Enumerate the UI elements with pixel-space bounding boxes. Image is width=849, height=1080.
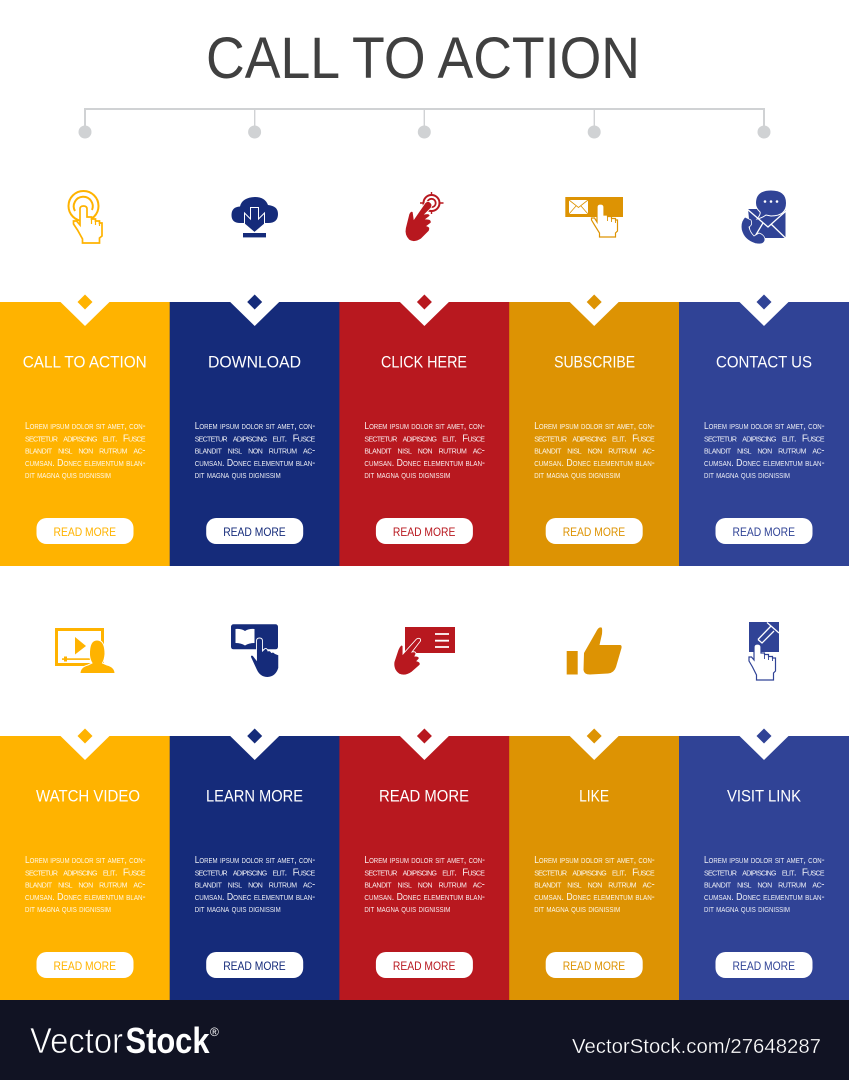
text block: dit magna quis dignissim (534, 470, 620, 481)
icon: learn more book (231, 624, 279, 678)
panel: contact us (679, 294, 849, 566)
text block: cumsan. Donec elementum blan- (195, 458, 315, 469)
heading: WATCH VIDEO (36, 787, 140, 806)
button (546, 952, 643, 978)
text block (195, 421, 316, 481)
text block: blandit nisl non rutrum ac- (25, 880, 146, 891)
text block: sectetur adipiscing elit. Fusce (534, 867, 655, 878)
heading: CLICK HERE (381, 353, 467, 372)
button (376, 518, 473, 544)
text block: dit magna quis dignissim (364, 904, 451, 915)
button: READ MORE (732, 959, 795, 973)
button (376, 952, 473, 978)
button: READ MORE (393, 525, 455, 539)
text block: blandit nisl non rutrum ac- (364, 880, 485, 891)
heading: READ MORE (379, 787, 469, 806)
logo: Stock (126, 1020, 210, 1061)
text block: Lorem ipsum dolor sit amet, con- (25, 855, 146, 866)
button (206, 518, 303, 544)
text block: cumsan. Donec elementum blan- (364, 458, 485, 469)
text block: Lorem ipsum dolor sit amet, con- (364, 855, 485, 866)
button (36, 952, 134, 978)
text block: dit magna quis dignissim (704, 470, 790, 481)
text block: dit magna quis dignissim (25, 904, 111, 915)
icon: cloud download (232, 197, 278, 237)
text block: blandit nisl non rutrum ac- (195, 446, 315, 457)
text block (704, 855, 825, 915)
panel: watch video (0, 728, 170, 1000)
panel: download (170, 294, 340, 566)
text block: sectetur adipiscing elit. Fusce (364, 433, 485, 444)
text block: blandit nisl non rutrum ac- (704, 446, 824, 457)
text block: Lorem ipsum dolor sit amet, con- (364, 421, 485, 432)
panel: call to action (0, 294, 170, 566)
button (546, 518, 643, 544)
button: READ MORE (563, 525, 625, 539)
text block (534, 855, 655, 915)
text block: blandit nisl non rutrum ac- (195, 880, 315, 891)
text block: Lorem ipsum dolor sit amet, con- (25, 421, 146, 432)
text block: cumsan. Donec elementum blan- (704, 458, 824, 469)
text block: sectetur adipiscing elit. Fusce (195, 433, 316, 444)
text block: blandit nisl non rutrum ac- (364, 446, 485, 457)
button: READ MORE (732, 525, 795, 539)
text block: dit magna quis dignissim (704, 904, 790, 915)
text block: dit magna quis dignissim (195, 470, 281, 481)
text block: sectetur adipiscing elit. Fusce (25, 433, 146, 444)
heading: DOWNLOAD (208, 353, 301, 372)
text block: Lorem ipsum dolor sit amet, con- (704, 855, 824, 866)
text block: cumsan. Donec elementum blan- (25, 458, 146, 469)
icon: read more card (394, 627, 455, 675)
button: READ MORE (563, 959, 625, 973)
panel: subscribe (509, 294, 679, 566)
button: READ MORE (393, 959, 455, 973)
text block: cumsan. Donec elementum blan- (195, 892, 315, 903)
icon: thumbs up like (567, 627, 622, 674)
text block: Lorem ipsum dolor sit amet, con- (195, 421, 315, 432)
text block (534, 421, 655, 481)
heading: LIKE (579, 787, 609, 806)
icon: touch target hand (68, 191, 102, 243)
connector tree (78, 108, 770, 138)
text block (195, 855, 316, 915)
button (716, 952, 812, 978)
text block: sectetur adipiscing elit. Fusce (704, 433, 825, 444)
text block: sectetur adipiscing elit. Fusce (364, 867, 485, 878)
icon: visit link (749, 622, 779, 680)
text block (364, 855, 485, 915)
logo: Vector (30, 1020, 123, 1061)
text block: blandit nisl non rutrum ac- (534, 446, 655, 457)
text block: sectetur adipiscing elit. Fusce (25, 867, 146, 878)
button (206, 952, 303, 978)
heading: LEARN MORE (206, 787, 303, 806)
text block: cumsan. Donec elementum blan- (25, 892, 146, 903)
text block (704, 421, 825, 481)
text block: Lorem ipsum dolor sit amet, con- (704, 421, 824, 432)
footer bar (0, 1000, 849, 1080)
text block: cumsan. Donec elementum blan- (704, 892, 824, 903)
text block: Lorem ipsum dolor sit amet, con- (195, 855, 315, 866)
button: READ MORE (54, 525, 116, 539)
icon: contact chat mail phone (741, 190, 786, 244)
button (36, 518, 134, 544)
button: READ MORE (54, 959, 116, 973)
text block: sectetur adipiscing elit. Fusce (534, 433, 655, 444)
heading: SUBSCRIBE (554, 353, 635, 372)
heading: CALL TO ACTION (23, 353, 147, 372)
panel: visit link (679, 728, 849, 1000)
button: READ MORE (223, 959, 286, 973)
text block: sectetur adipiscing elit. Fusce (704, 867, 825, 878)
image id: VectorStock.com/27648287 (572, 1035, 821, 1058)
logo: ® (210, 1025, 219, 1039)
icon: click target hand (405, 192, 444, 242)
panel: read more (339, 728, 510, 1000)
text block: Lorem ipsum dolor sit amet, con- (534, 421, 655, 432)
text block: blandit nisl non rutrum ac- (534, 880, 655, 891)
text block: blandit nisl non rutrum ac- (25, 446, 146, 457)
text block (25, 855, 146, 915)
icon: watch video (56, 630, 115, 674)
panel: learn more (170, 728, 340, 1000)
panel: like (509, 728, 679, 1000)
text block: sectetur adipiscing elit. Fusce (195, 867, 316, 878)
text block: cumsan. Donec elementum blan- (534, 458, 655, 469)
heading: CONTACT US (716, 353, 812, 372)
text block: blandit nisl non rutrum ac- (704, 880, 824, 891)
text block: dit magna quis dignissim (534, 904, 620, 915)
text block: Lorem ipsum dolor sit amet, con- (534, 855, 655, 866)
icon: subscribe email button (565, 197, 623, 237)
panel: click here (339, 294, 510, 566)
button (716, 518, 812, 544)
text block: dit magna quis dignissim (195, 904, 281, 915)
text block: cumsan. Donec elementum blan- (364, 892, 485, 903)
text block (364, 421, 485, 481)
heading: VISIT LINK (727, 787, 801, 806)
text block: dit magna quis dignissim (25, 470, 111, 481)
logo (30, 1020, 219, 1061)
text block (25, 421, 146, 481)
button: READ MORE (223, 525, 286, 539)
text block: cumsan. Donec elementum blan- (534, 892, 655, 903)
title: CALL TO ACTION (206, 26, 640, 91)
text block: dit magna quis dignissim (364, 470, 451, 481)
